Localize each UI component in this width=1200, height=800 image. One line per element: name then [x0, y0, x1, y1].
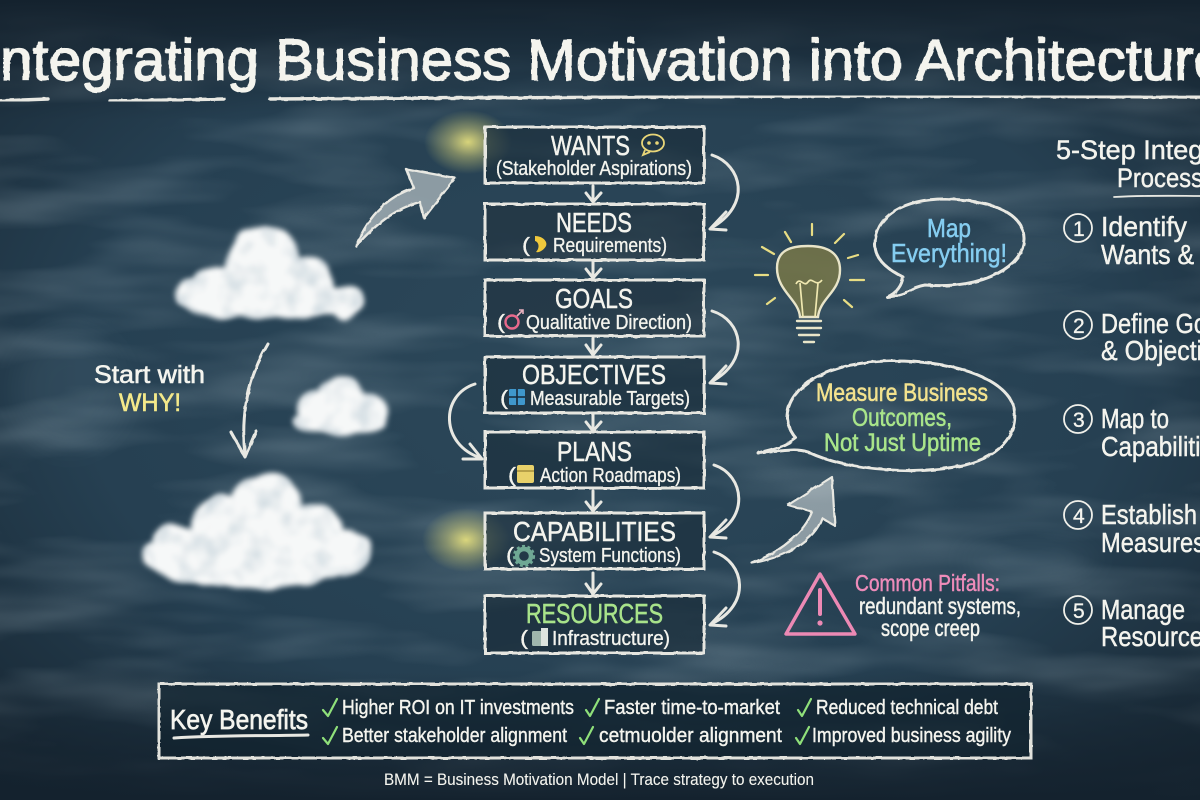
flow chart — [449, 127, 740, 653]
box: wants — [485, 127, 704, 183]
box: goals: ( — [497, 312, 505, 334]
box: wants: (Stakeholder Aspirations) — [496, 158, 692, 180]
box: needs: Requirements) — [553, 235, 667, 257]
clouds — [140, 226, 389, 588]
box: resources: ( — [520, 628, 528, 650]
step 2 — [1064, 308, 1200, 366]
benefit items: Faster time-to-market — [604, 697, 780, 719]
arrow: down to bottom cloud — [231, 344, 268, 457]
benefit items: cetmuolder alignment — [599, 725, 782, 747]
step 1: Identify — [1101, 211, 1187, 242]
step 1 — [1064, 211, 1200, 270]
step 5 — [1064, 594, 1200, 652]
box: capabilities: System Functions) — [539, 545, 681, 567]
benefit items: Reduced technical debt — [816, 697, 998, 719]
start with why label: WHY! — [119, 389, 181, 417]
key benefits heading: Key Benefits — [170, 704, 308, 735]
box: plans: Action Roadmaps) — [540, 465, 681, 487]
common pitfalls callout: Common Pitfalls: — [855, 570, 1000, 596]
box: objectives: ( — [500, 388, 508, 410]
key benefits panel — [159, 684, 1031, 758]
arrow: top cloud to wants — [356, 169, 455, 246]
common pitfalls callout: scope creep — [881, 615, 980, 641]
benefit items: Better stakeholder alignment — [342, 725, 567, 747]
speech bubble: measure outcomes: Outcomes, — [852, 404, 952, 432]
speech bubble: measure outcomes: Not Just Uptime — [824, 429, 981, 457]
box: objectives — [485, 357, 704, 413]
box: capabilities: ( — [506, 545, 514, 567]
box: needs: NEEDS — [556, 207, 632, 238]
step 3 — [1064, 403, 1200, 462]
benefit items — [323, 697, 1011, 747]
box: resources: Infrastructure) — [552, 628, 670, 650]
box: goals: GOALS — [555, 283, 633, 314]
benefit items: Improved business agility — [812, 725, 1011, 747]
box: plans: ( — [508, 465, 516, 487]
speech bubble: measure outcomes: Measure Business — [816, 379, 988, 407]
arrow: capabilities to bubble — [752, 477, 835, 563]
step 4: 4 — [1073, 505, 1085, 528]
box: goals — [485, 280, 704, 336]
step 5: Manage — [1101, 594, 1185, 625]
box: plans — [485, 432, 704, 488]
benefit items: Higher ROI on IT investments — [342, 697, 574, 719]
down arrows between boxes — [586, 186, 601, 594]
speech bubble: map everything — [875, 199, 1024, 297]
footer note: BMM = Business Motivation Model | Trace strategy to execution — [384, 770, 814, 789]
box: objectives: OBJECTIVES — [522, 359, 666, 390]
process panel: 5-step integration — [1056, 135, 1200, 652]
cloud: middle — [292, 376, 389, 435]
speech bubble: map everything: Map — [927, 213, 971, 243]
yellow chalk smudges — [422, 110, 512, 572]
box: resources — [485, 596, 704, 653]
common pitfalls callout — [786, 570, 1021, 641]
start with why label: Start with — [94, 361, 205, 389]
box: goals: Qualitative Direction) — [526, 312, 692, 334]
box: plans: PLANS — [557, 436, 632, 467]
curved side arrows — [449, 155, 740, 626]
step 3: 3 — [1073, 409, 1085, 432]
start with why label — [94, 361, 205, 417]
box: needs: ( — [522, 235, 530, 257]
cloud: top — [177, 226, 363, 320]
box: capabilities — [485, 513, 704, 569]
box: needs — [485, 204, 704, 260]
speech bubble: measure outcomes — [758, 361, 1015, 471]
box: capabilities: CAPABILITIES — [513, 516, 676, 547]
icon: warning triangle — [786, 574, 855, 634]
step 5: 5 — [1073, 600, 1085, 623]
light bulb icon — [755, 224, 864, 342]
step 2: 2 — [1073, 315, 1085, 338]
box: objectives: Measurable Targets) — [530, 388, 690, 410]
cloud: bottom — [140, 474, 369, 588]
common pitfalls callout: redundant systems, — [859, 593, 1021, 619]
step 4 — [1064, 499, 1200, 558]
process heading — [1056, 135, 1200, 197]
box: wants: WANTS — [551, 130, 630, 161]
box: resources: RESOURCES — [526, 598, 663, 629]
speech bubble: map everything: Everything! — [891, 238, 1007, 268]
step 3: Map to — [1101, 403, 1169, 434]
step 1: 1 — [1073, 218, 1085, 241]
